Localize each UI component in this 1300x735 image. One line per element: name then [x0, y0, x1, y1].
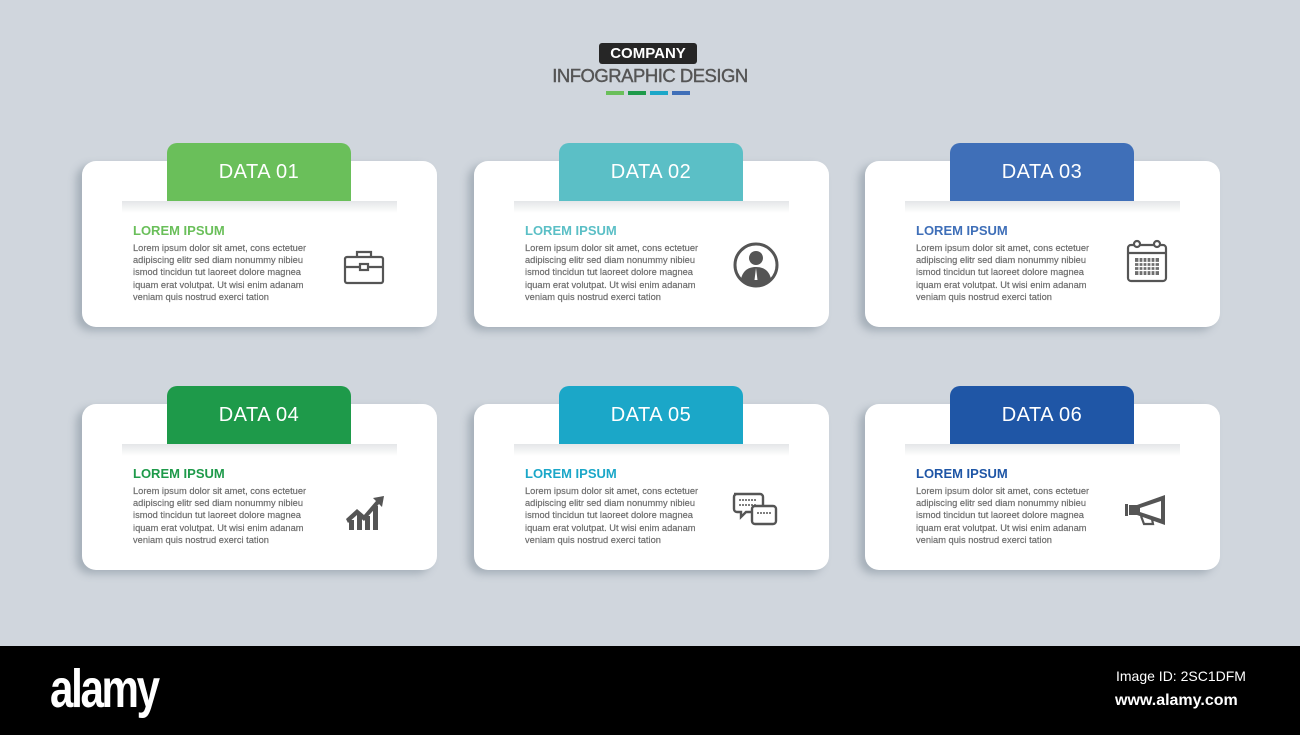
text: [525, 243, 698, 302]
tab 06: DATA 06: [1002, 404, 1082, 426]
heading: LOREM IPSUM: [525, 223, 617, 238]
heading: LOREM IPSUM: [525, 466, 617, 481]
text: veniam quis nostrud exerci tation: [525, 292, 661, 302]
image id: Image ID: 2SC1DFM: [1116, 668, 1246, 684]
tab 01: DATA 01: [219, 161, 299, 183]
panel: data 06: [865, 404, 1220, 570]
tab 02: [559, 143, 743, 201]
text: Lorem ipsum dolor sit amet, cons ectetuer: [916, 243, 1089, 253]
heading: LOREM IPSUM: [916, 223, 1008, 238]
text: ismod tincidun tut laoreet dolore magnea: [525, 267, 693, 277]
text: [916, 486, 1090, 546]
text: adipiscing elitr sed diam nonummy nibieu: [916, 498, 1086, 508]
company badge: COMPANY: [610, 45, 686, 62]
text: Lorem ipsum dolor sit amet, cons ectetuer: [916, 486, 1089, 496]
icon: growth chart: [346, 496, 384, 530]
text: adipiscing elitr sed diam nonummy nibieu: [525, 498, 695, 508]
heading: LOREM IPSUM: [133, 223, 225, 238]
tab 03: [950, 143, 1134, 201]
text: Lorem ipsum dolor sit amet, cons ectetuer: [525, 486, 698, 496]
text: ismod tincidun tut laoreet dolore magnea: [916, 267, 1084, 277]
text: adipiscing elitr sed diam nonummy nibieu: [133, 255, 303, 265]
panel: data 03: [865, 161, 1220, 327]
text: veniam quis nostrud exerci tation: [133, 292, 269, 302]
text: veniam quis nostrud exerci tation: [916, 292, 1052, 302]
panel: data 05: [474, 404, 829, 570]
panel: data 04: [82, 404, 437, 570]
tab 04: DATA 04: [219, 404, 299, 426]
heading: LOREM IPSUM: [916, 466, 1008, 481]
text: iquam erat volutpat. Ut wisi enim adanam: [916, 280, 1087, 290]
text: [133, 243, 306, 302]
text: iquam erat volutpat. Ut wisi enim adanam: [916, 523, 1087, 533]
tab 05: DATA 05: [611, 404, 691, 426]
text: adipiscing elitr sed diam nonummy nibieu: [133, 498, 303, 508]
icon: person: [734, 242, 778, 288]
text: Lorem ipsum dolor sit amet, cons ectetuer: [133, 243, 306, 253]
color bars: [606, 91, 690, 95]
text: [525, 486, 698, 546]
text: adipiscing elitr sed diam nonummy nibieu: [525, 255, 695, 265]
text: [133, 486, 306, 546]
heading: LOREM IPSUM: [133, 466, 225, 481]
panel: data 02: [474, 161, 829, 327]
icon: megaphone: [1125, 495, 1165, 526]
icon: briefcase: [344, 250, 384, 284]
footer logo: alamy: [50, 659, 158, 719]
title: [552, 43, 748, 95]
text: ismod tincidun tut laoreet dolore magnea: [133, 267, 301, 277]
tab 04: [167, 386, 351, 444]
tab 02: DATA 02: [611, 161, 691, 183]
panel: data 01: [82, 161, 437, 327]
text: iquam erat volutpat. Ut wisi enim adanam: [133, 280, 304, 290]
url: www.alamy.com: [1115, 692, 1238, 709]
tab 01: [167, 143, 351, 201]
text: iquam erat volutpat. Ut wisi enim adanam: [133, 523, 304, 533]
text: veniam quis nostrud exerci tation: [916, 535, 1052, 545]
icon: chat bubbles: [732, 492, 778, 526]
icon: calendar: [1126, 240, 1168, 282]
text: iquam erat volutpat. Ut wisi enim adanam: [525, 280, 696, 290]
text: iquam erat volutpat. Ut wisi enim adanam: [525, 523, 696, 533]
footer bar: [0, 646, 1300, 735]
text: adipiscing elitr sed diam nonummy nibieu: [916, 255, 1086, 265]
tab 06: [950, 386, 1134, 444]
text: veniam quis nostrud exerci tation: [525, 535, 661, 545]
text: veniam quis nostrud exerci tation: [133, 535, 269, 545]
text: ismod tincidun tut laoreet dolore magnea: [133, 510, 301, 520]
subtitle: INFOGRAPHIC DESIGN: [552, 65, 748, 86]
tab 05: [559, 386, 743, 444]
text: Lorem ipsum dolor sit amet, cons ectetuer: [525, 243, 698, 253]
text: ismod tincidun tut laoreet dolore magnea: [525, 510, 693, 520]
company badge: [599, 43, 697, 64]
text: ismod tincidun tut laoreet dolore magnea: [916, 510, 1084, 520]
text: Lorem ipsum dolor sit amet, cons ectetuer: [133, 486, 306, 496]
tab 03: DATA 03: [1002, 161, 1082, 183]
text: [916, 243, 1090, 302]
